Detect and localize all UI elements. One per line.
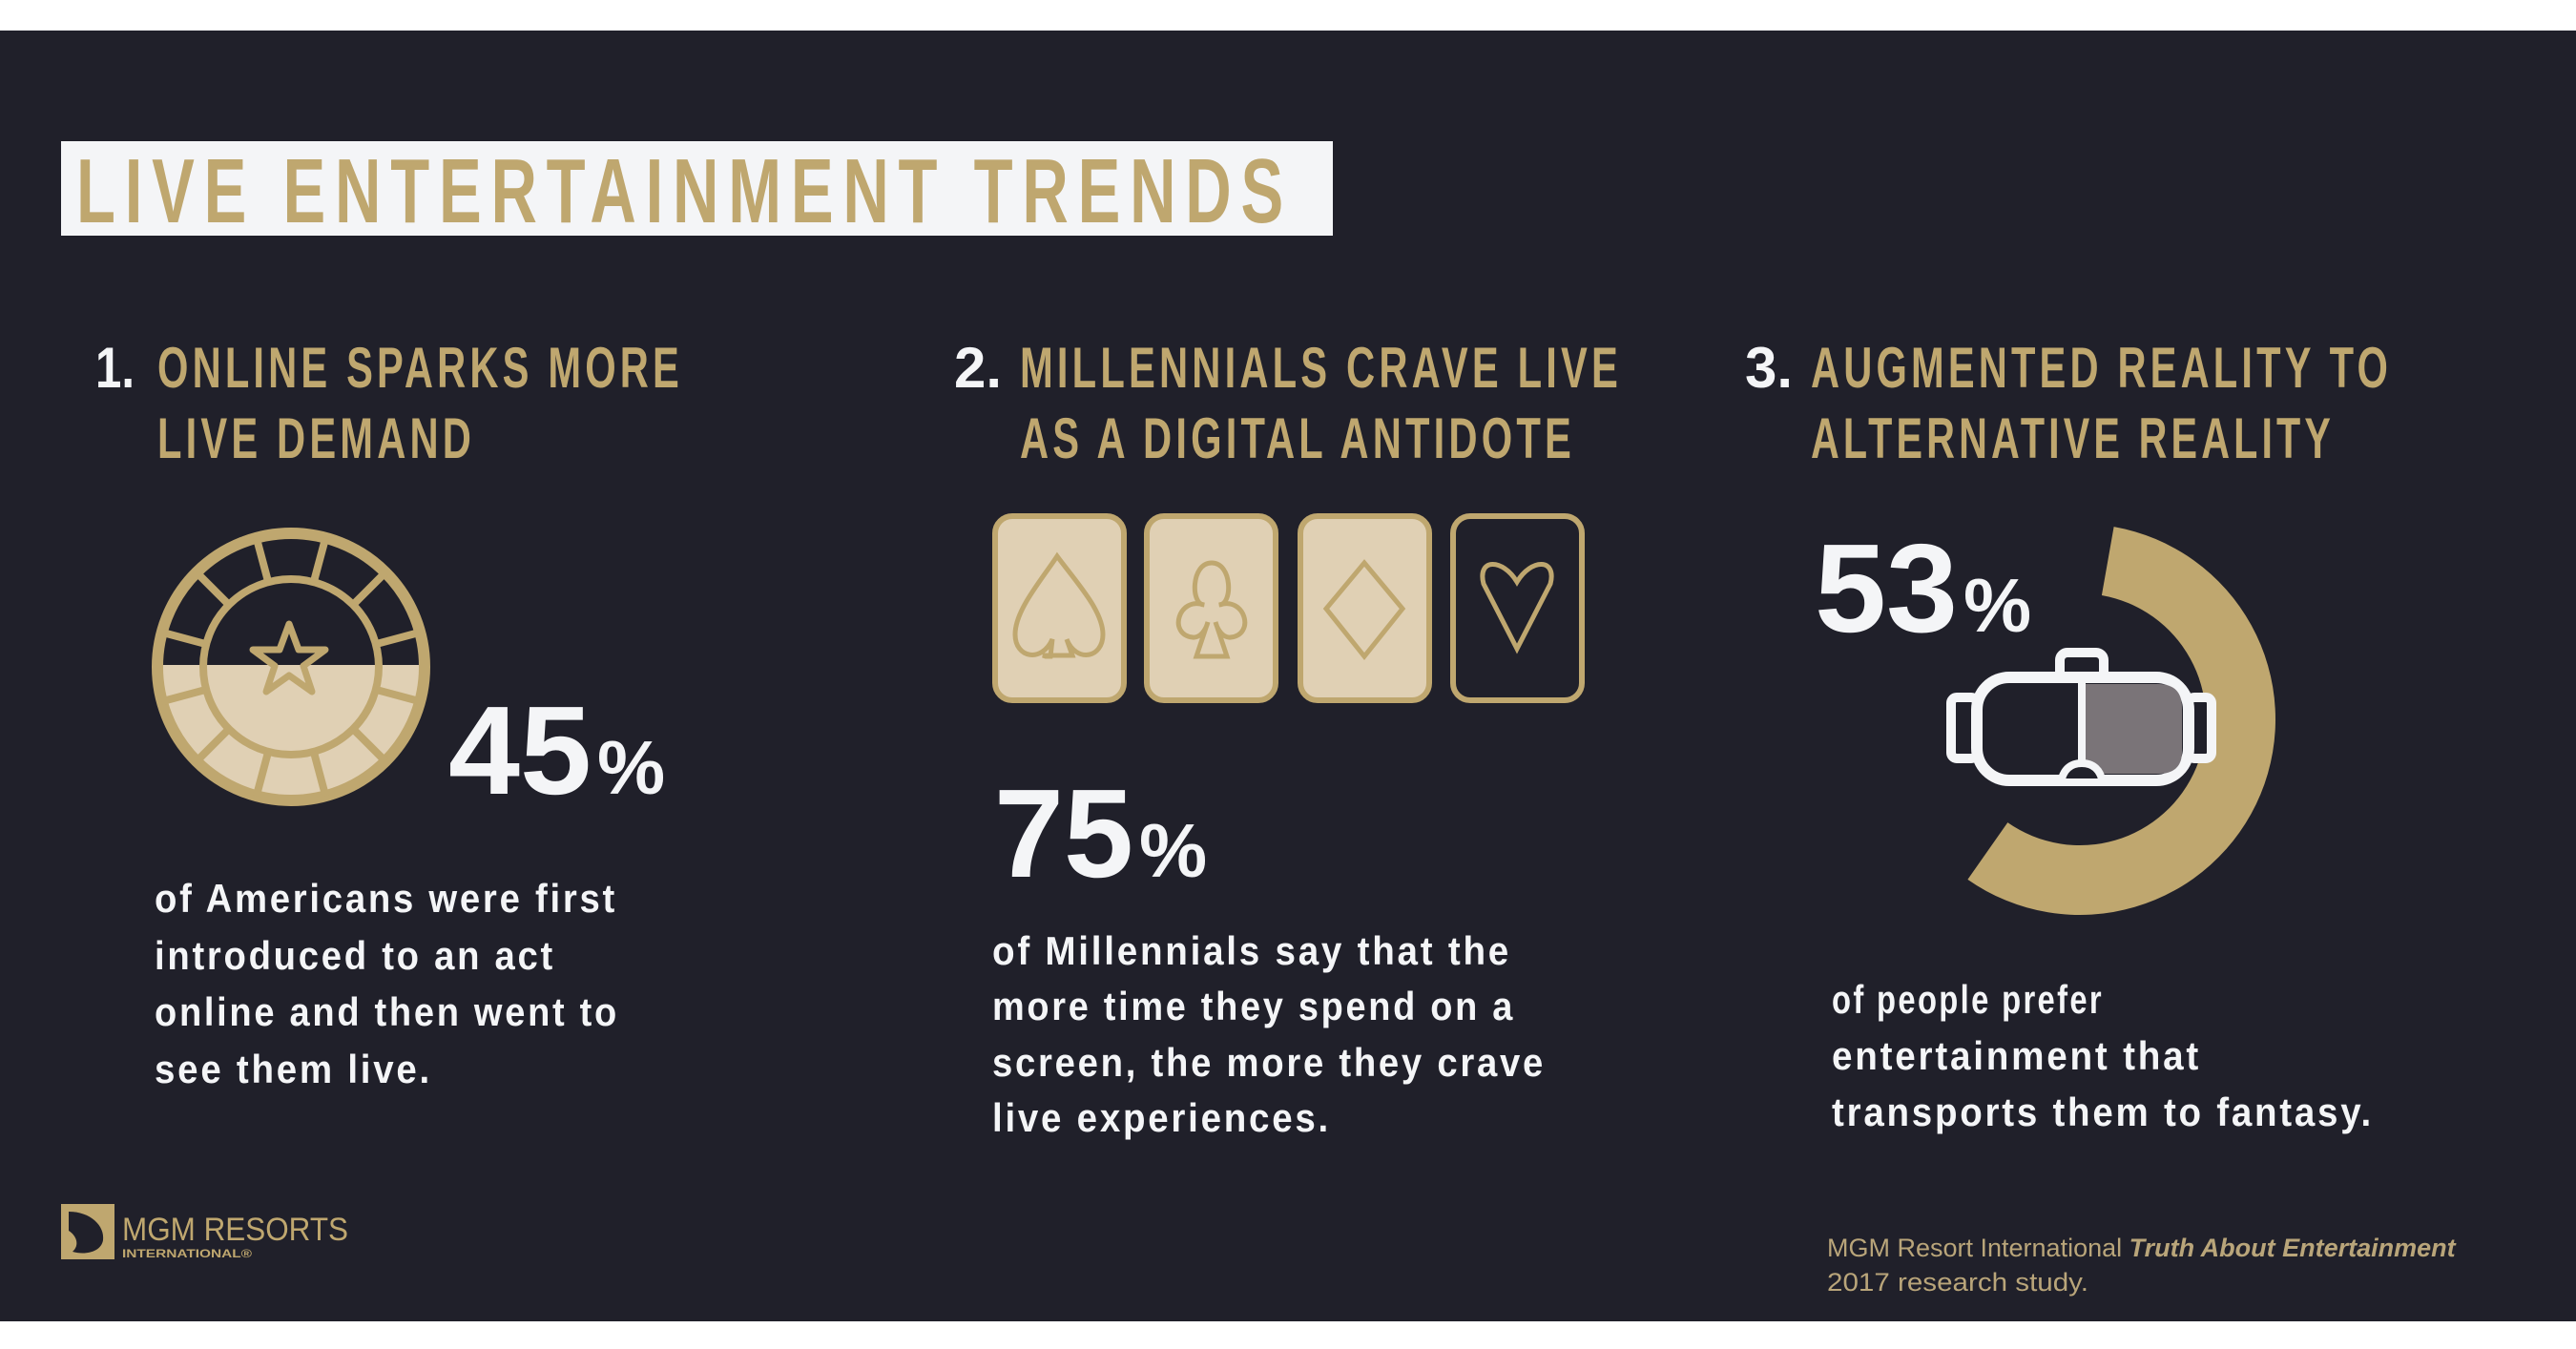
body text 2: live experiences. bbox=[992, 1095, 1331, 1140]
heading 3: 3. bbox=[1745, 336, 1793, 400]
heading 1: 1. bbox=[95, 336, 135, 400]
heading 3: ALTERNATIVE REALITY bbox=[1811, 406, 2335, 470]
body text 2: of Millennials say that the bbox=[992, 928, 1511, 973]
stat 75%: 75% bbox=[994, 763, 1207, 903]
stat 45%: 45% bbox=[448, 680, 665, 820]
citation: MGM Resort International Truth About Entertainment bbox=[1827, 1234, 2457, 1262]
logo: MGM Resorts bbox=[61, 1204, 348, 1260]
heading 2: MILLENNIALS CRAVE LIVE bbox=[1020, 336, 1622, 400]
citation: 2017 research study. bbox=[1827, 1268, 2088, 1297]
body text 1: of Americans were first bbox=[155, 876, 617, 921]
body text 3: of people prefer bbox=[1832, 977, 2104, 1022]
body text 1 bbox=[155, 876, 619, 1091]
chart: 53% donut arc bbox=[1967, 527, 2275, 915]
title: LIVE ENTERTAINMENT TRENDS bbox=[76, 140, 1293, 242]
logo: MGM Resorts: INTERNATIONAL® bbox=[122, 1247, 252, 1260]
body text 2: screen, the more they crave bbox=[992, 1040, 1546, 1085]
heading 2: AS A DIGITAL ANTIDOTE bbox=[1020, 406, 1575, 470]
body text 1: online and then went to bbox=[155, 989, 619, 1034]
panel: online sparks bbox=[95, 336, 683, 1091]
logo: MGM Resorts: MGM RESORTS bbox=[122, 1212, 348, 1248]
heading 1 bbox=[95, 336, 683, 470]
heading 3 bbox=[1745, 336, 2392, 470]
citation bbox=[1827, 1234, 2457, 1297]
body text 1: see them live. bbox=[155, 1047, 432, 1091]
body text 3: entertainment that bbox=[1832, 1033, 2201, 1078]
heading 1: LIVE DEMAND bbox=[157, 406, 475, 470]
body text 2: more time they spend on a bbox=[992, 984, 1515, 1028]
heading 2: 2. bbox=[954, 336, 1002, 400]
panel: millennials bbox=[954, 336, 1622, 1140]
body text 3 bbox=[1832, 977, 2374, 1134]
body text 2 bbox=[992, 928, 1546, 1140]
icon: playing cards bbox=[995, 516, 1582, 700]
stat 53%: 53% bbox=[1815, 518, 2031, 658]
body text 1: introduced to an act bbox=[155, 933, 555, 978]
heading 2 bbox=[954, 336, 1622, 470]
icon: casino chip bbox=[157, 533, 425, 800]
icon: VR headset bbox=[1951, 653, 2212, 782]
heading 1: ONLINE SPARKS MORE bbox=[157, 336, 683, 400]
panel: augmented reality bbox=[1745, 336, 2392, 1134]
body text 3: transports them to fantasy. bbox=[1832, 1090, 2374, 1134]
